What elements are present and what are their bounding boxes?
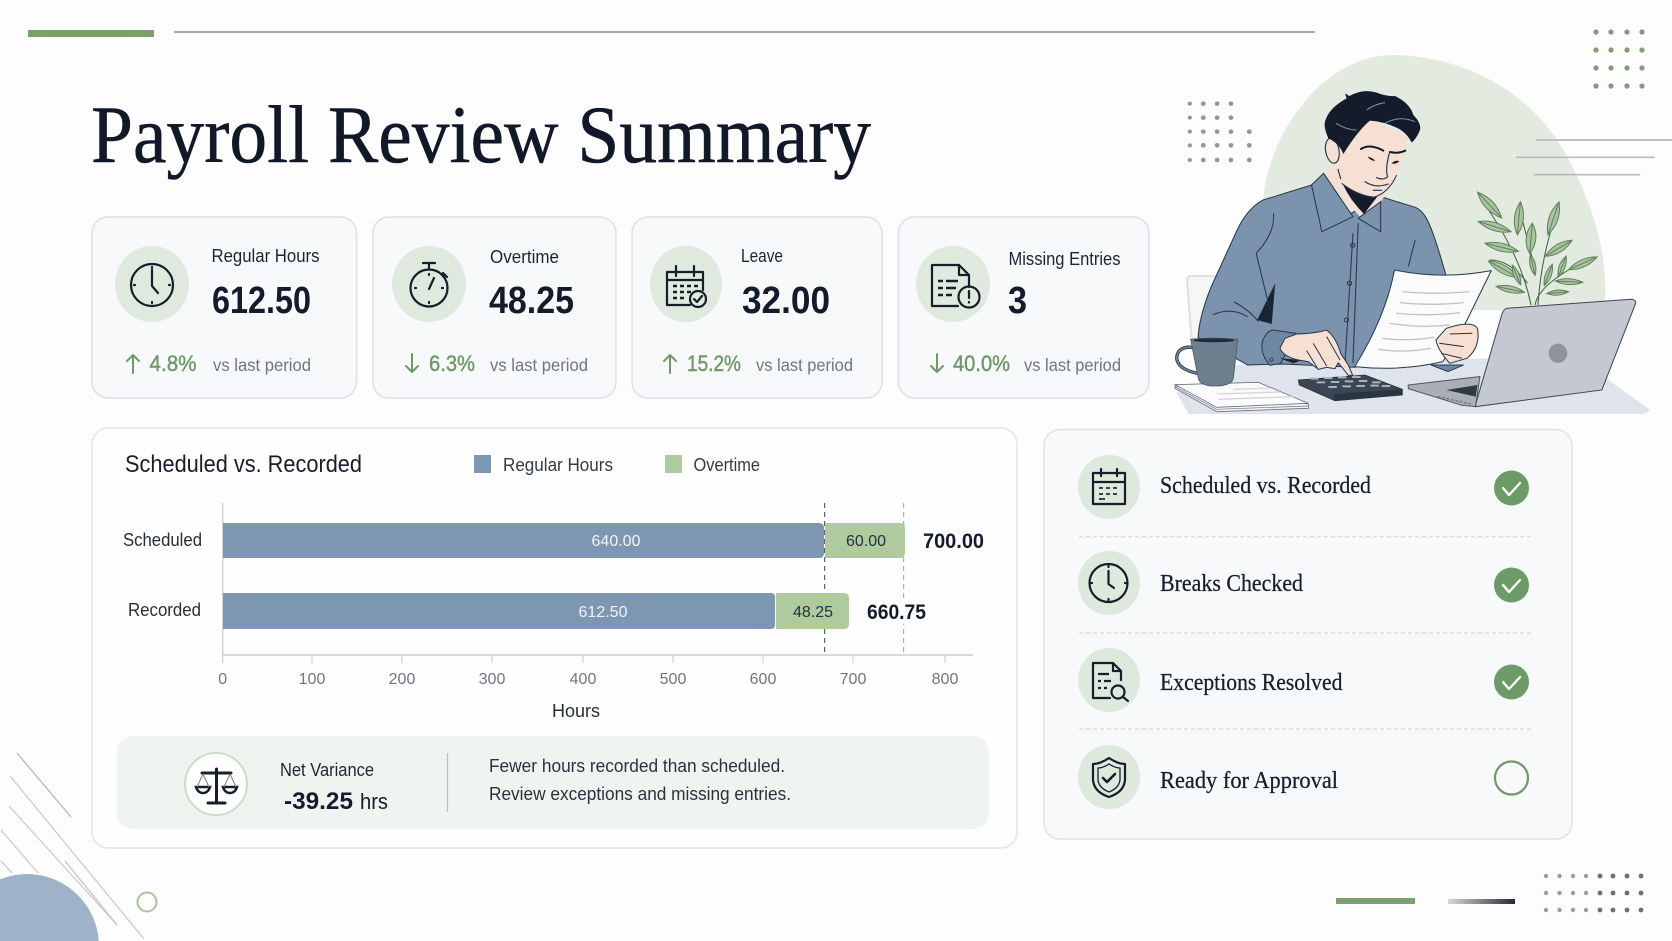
value: 32.00	[742, 280, 830, 322]
trend: 4.8%	[150, 351, 196, 376]
item: breaks checked	[1078, 551, 1529, 615]
variance note: Fewer hours recorded than scheduled.	[489, 756, 785, 776]
axis labels: 700	[840, 671, 866, 688]
bar chart	[123, 503, 984, 721]
axis labels: Hours	[552, 701, 600, 721]
trend: 6.3%	[429, 351, 475, 376]
variance note	[489, 756, 791, 804]
panel: scheduled vs recorded chart	[0, 428, 1643, 941]
recorded bar: 660.75	[867, 601, 926, 624]
notebook	[1175, 386, 1308, 412]
trend: 40.0%	[953, 351, 1010, 376]
legend: Regular Hours	[503, 455, 613, 475]
icon: clock	[115, 246, 189, 322]
axis labels	[218, 671, 958, 721]
trend	[406, 351, 588, 376]
recorded bar: Recorded	[128, 600, 201, 620]
chair back	[1187, 276, 1218, 338]
item: ready for approval	[1078, 745, 1528, 809]
net variance strip	[117, 736, 989, 829]
document and right hand	[1355, 270, 1491, 372]
trend	[664, 351, 853, 376]
value: 48.25	[489, 280, 574, 322]
chart title: Scheduled vs. Recorded	[125, 451, 362, 478]
icon: balance scale	[185, 753, 247, 815]
label: Regular Hours	[212, 246, 320, 266]
item: scheduled vs recorded: Scheduled vs. Recorded	[1160, 473, 1371, 499]
item: exceptions resolved	[1078, 648, 1529, 712]
plant	[1474, 189, 1599, 305]
left hand	[1280, 330, 1353, 375]
icon: stopwatch	[392, 246, 466, 322]
title: Payroll Review Summary	[91, 89, 871, 180]
head	[1324, 91, 1420, 214]
illustration: man reviewing payroll at desk	[1175, 55, 1672, 414]
arm shadow	[1257, 283, 1275, 324]
scheduled bar: 700.00	[923, 530, 984, 553]
item: ready for approval: Ready for Approval	[1160, 768, 1338, 794]
trend: vs last period	[490, 355, 588, 375]
net variance value: -39.25	[284, 788, 353, 815]
trend: vs last period	[1024, 355, 1121, 375]
trend	[127, 351, 311, 376]
net variance value	[280, 760, 388, 815]
top accent rule	[28, 30, 1315, 37]
item: breaks checked: Breaks Checked	[1160, 571, 1303, 597]
axis labels: 100	[299, 671, 325, 688]
scheduled bar: 640.00	[592, 533, 641, 550]
recorded bar: 48.25	[793, 604, 833, 621]
shirt buttons	[1344, 243, 1355, 322]
item: scheduled vs recorded	[1078, 455, 1529, 519]
laptop	[1408, 299, 1636, 407]
decoration: bottom left lines and circles	[0, 753, 156, 941]
trend: vs last period	[756, 355, 853, 375]
panel: regular hours card	[92, 217, 356, 398]
green blob backdrop	[1263, 55, 1605, 310]
panel: leave card	[632, 217, 882, 398]
chest skin	[1324, 163, 1387, 223]
scheduled bar: 60.00	[846, 533, 886, 550]
label: Overtime	[490, 247, 559, 267]
trend: vs last period	[213, 355, 311, 375]
legend	[474, 455, 760, 475]
accent lines	[1516, 140, 1672, 175]
item: exceptions resolved: Exceptions Resolved	[1160, 670, 1342, 696]
icon: calendar with check	[650, 246, 722, 322]
label: Missing Entries	[1008, 249, 1120, 269]
axis labels: 500	[660, 671, 686, 688]
label: Leave	[741, 246, 783, 266]
axis labels: 200	[389, 671, 415, 688]
net variance value: hrs	[360, 789, 388, 814]
value: 3	[1008, 280, 1027, 322]
axis labels: 800	[932, 671, 958, 688]
collars	[1311, 173, 1381, 232]
desk surface	[1177, 358, 1650, 414]
trend	[931, 351, 1121, 376]
decoration: bottom right bars and dots	[1336, 874, 1643, 912]
panel: overtime card	[373, 217, 616, 398]
axis labels: 300	[479, 671, 505, 688]
shirt	[1198, 185, 1446, 367]
axis labels: 600	[750, 671, 776, 688]
cuff	[1262, 330, 1296, 365]
legend: Overtime	[694, 455, 760, 475]
recorded bar: 612.50	[579, 604, 628, 621]
scheduled bar: Scheduled	[123, 530, 202, 550]
net variance value: Net Variance	[280, 760, 374, 780]
decoration: top right green dots	[1593, 29, 1645, 89]
coffee mug	[1177, 347, 1197, 373]
panel: missing entries card	[898, 217, 1149, 398]
scheduled bar	[123, 523, 984, 558]
panel: review checklist	[1044, 430, 1572, 839]
desk items: mug, notebook, calculator, left hand	[1175, 330, 1402, 412]
axis labels: 0	[218, 671, 227, 688]
grey dot grid	[1188, 101, 1252, 162]
axis labels: 400	[570, 671, 596, 688]
shirt seams	[1213, 213, 1415, 363]
value: 612.50	[212, 280, 311, 322]
variance note: Review exceptions and missing entries.	[489, 784, 791, 804]
scene backdrop and body	[1177, 55, 1672, 414]
trend: 15.2%	[687, 351, 741, 376]
icon: document with alert	[916, 246, 990, 322]
calculator	[1298, 375, 1402, 401]
recorded bar	[128, 593, 926, 629]
